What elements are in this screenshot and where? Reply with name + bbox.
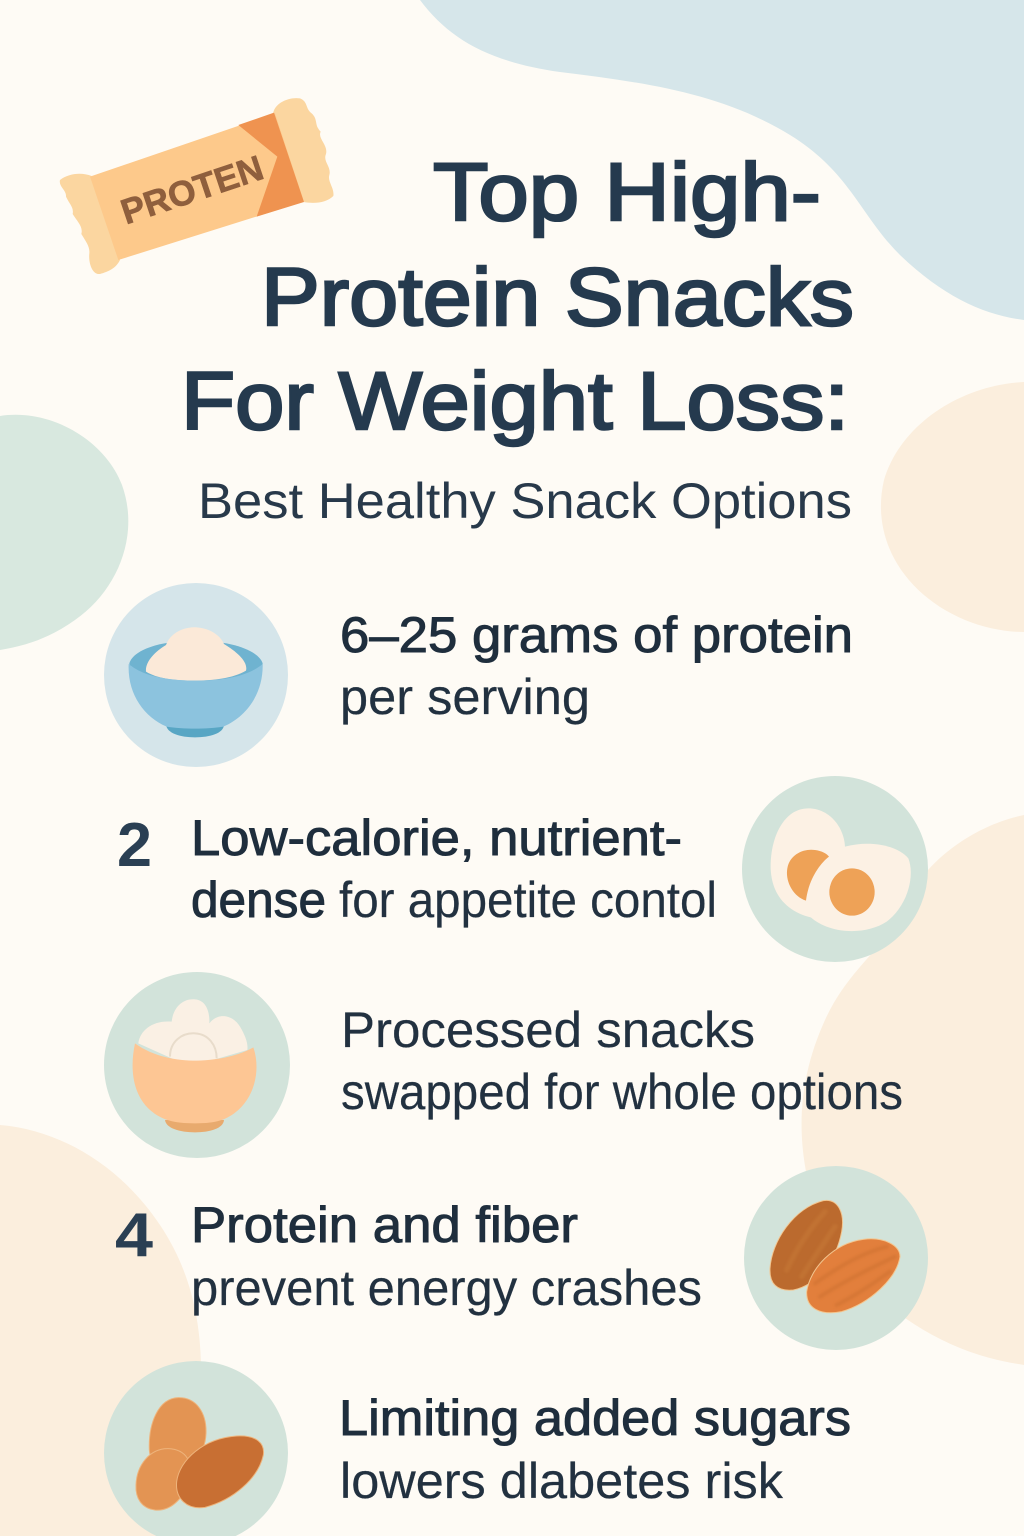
title: For Weight Loss: xyxy=(181,356,849,447)
yolk left xyxy=(787,850,829,901)
point 1 text: per serving xyxy=(340,669,590,725)
almond back ridges xyxy=(787,1212,835,1277)
bar body xyxy=(90,113,304,260)
egg white right xyxy=(809,844,911,931)
snack outline xyxy=(170,1033,217,1058)
point 5 text: Limiting added sugars xyxy=(339,1390,851,1446)
number 2: 2 xyxy=(117,811,152,880)
point 1 text xyxy=(340,607,853,725)
point 1 text: 6–25 grams of protein xyxy=(340,607,853,663)
bowl body xyxy=(129,664,263,729)
powder xyxy=(146,627,246,681)
point 2 text xyxy=(191,810,717,928)
bar orange stripe xyxy=(238,113,304,217)
almond back xyxy=(770,1200,843,1290)
snacks in bowl xyxy=(138,999,248,1067)
almond front ridges xyxy=(815,1247,895,1305)
point 4 text: Protein and fiber xyxy=(191,1197,578,1253)
number 4: 4 xyxy=(115,1201,154,1270)
bowl body xyxy=(133,1043,256,1123)
blob: left green xyxy=(0,415,128,650)
bowl inside xyxy=(129,641,263,683)
point 3 text: swapped for whole options xyxy=(341,1064,903,1120)
subtitle: Best Healthy Snack Options xyxy=(198,473,852,529)
title: Top High- xyxy=(433,147,821,238)
bar left crimp xyxy=(60,174,120,274)
icon: bowl of protein xyxy=(104,583,288,767)
point 2 text: for appetite contol xyxy=(339,872,717,928)
bowl foot xyxy=(165,1120,224,1132)
blob: top right blue xyxy=(420,0,1024,320)
title xyxy=(181,147,854,447)
title: Protein Snacks xyxy=(261,252,854,343)
icon: almonds xyxy=(744,1166,928,1350)
nut top xyxy=(149,1398,206,1467)
blob: lower right peach xyxy=(802,815,1024,1365)
nut lower left xyxy=(136,1449,191,1510)
yolk right xyxy=(829,868,875,916)
point 4 text: prevent energy crashes xyxy=(191,1260,702,1316)
bar label: PROTEN xyxy=(116,149,268,232)
egg white left xyxy=(771,808,845,918)
point 2 text: Low-calorie, nutrient- xyxy=(191,810,682,866)
bowl foot xyxy=(166,725,224,737)
icon: bowl of whole snacks xyxy=(104,972,290,1158)
icon: protein bar xyxy=(60,98,333,274)
point 3 text xyxy=(341,1002,903,1120)
point 5 text xyxy=(339,1390,851,1509)
blob: right peach xyxy=(881,382,1024,632)
icon: nuts xyxy=(104,1361,288,1536)
almond front xyxy=(807,1239,900,1313)
point 4 text xyxy=(191,1197,702,1316)
nut right xyxy=(177,1436,264,1508)
point 2 text: dense xyxy=(191,872,326,928)
bar right crimp xyxy=(273,98,333,203)
point 3 text: Processed snacks xyxy=(341,1002,755,1058)
icon: boiled eggs xyxy=(742,776,928,962)
point 5 text: lowers dlabetes risk xyxy=(340,1453,784,1509)
blob: bottom left peach xyxy=(0,1125,201,1536)
